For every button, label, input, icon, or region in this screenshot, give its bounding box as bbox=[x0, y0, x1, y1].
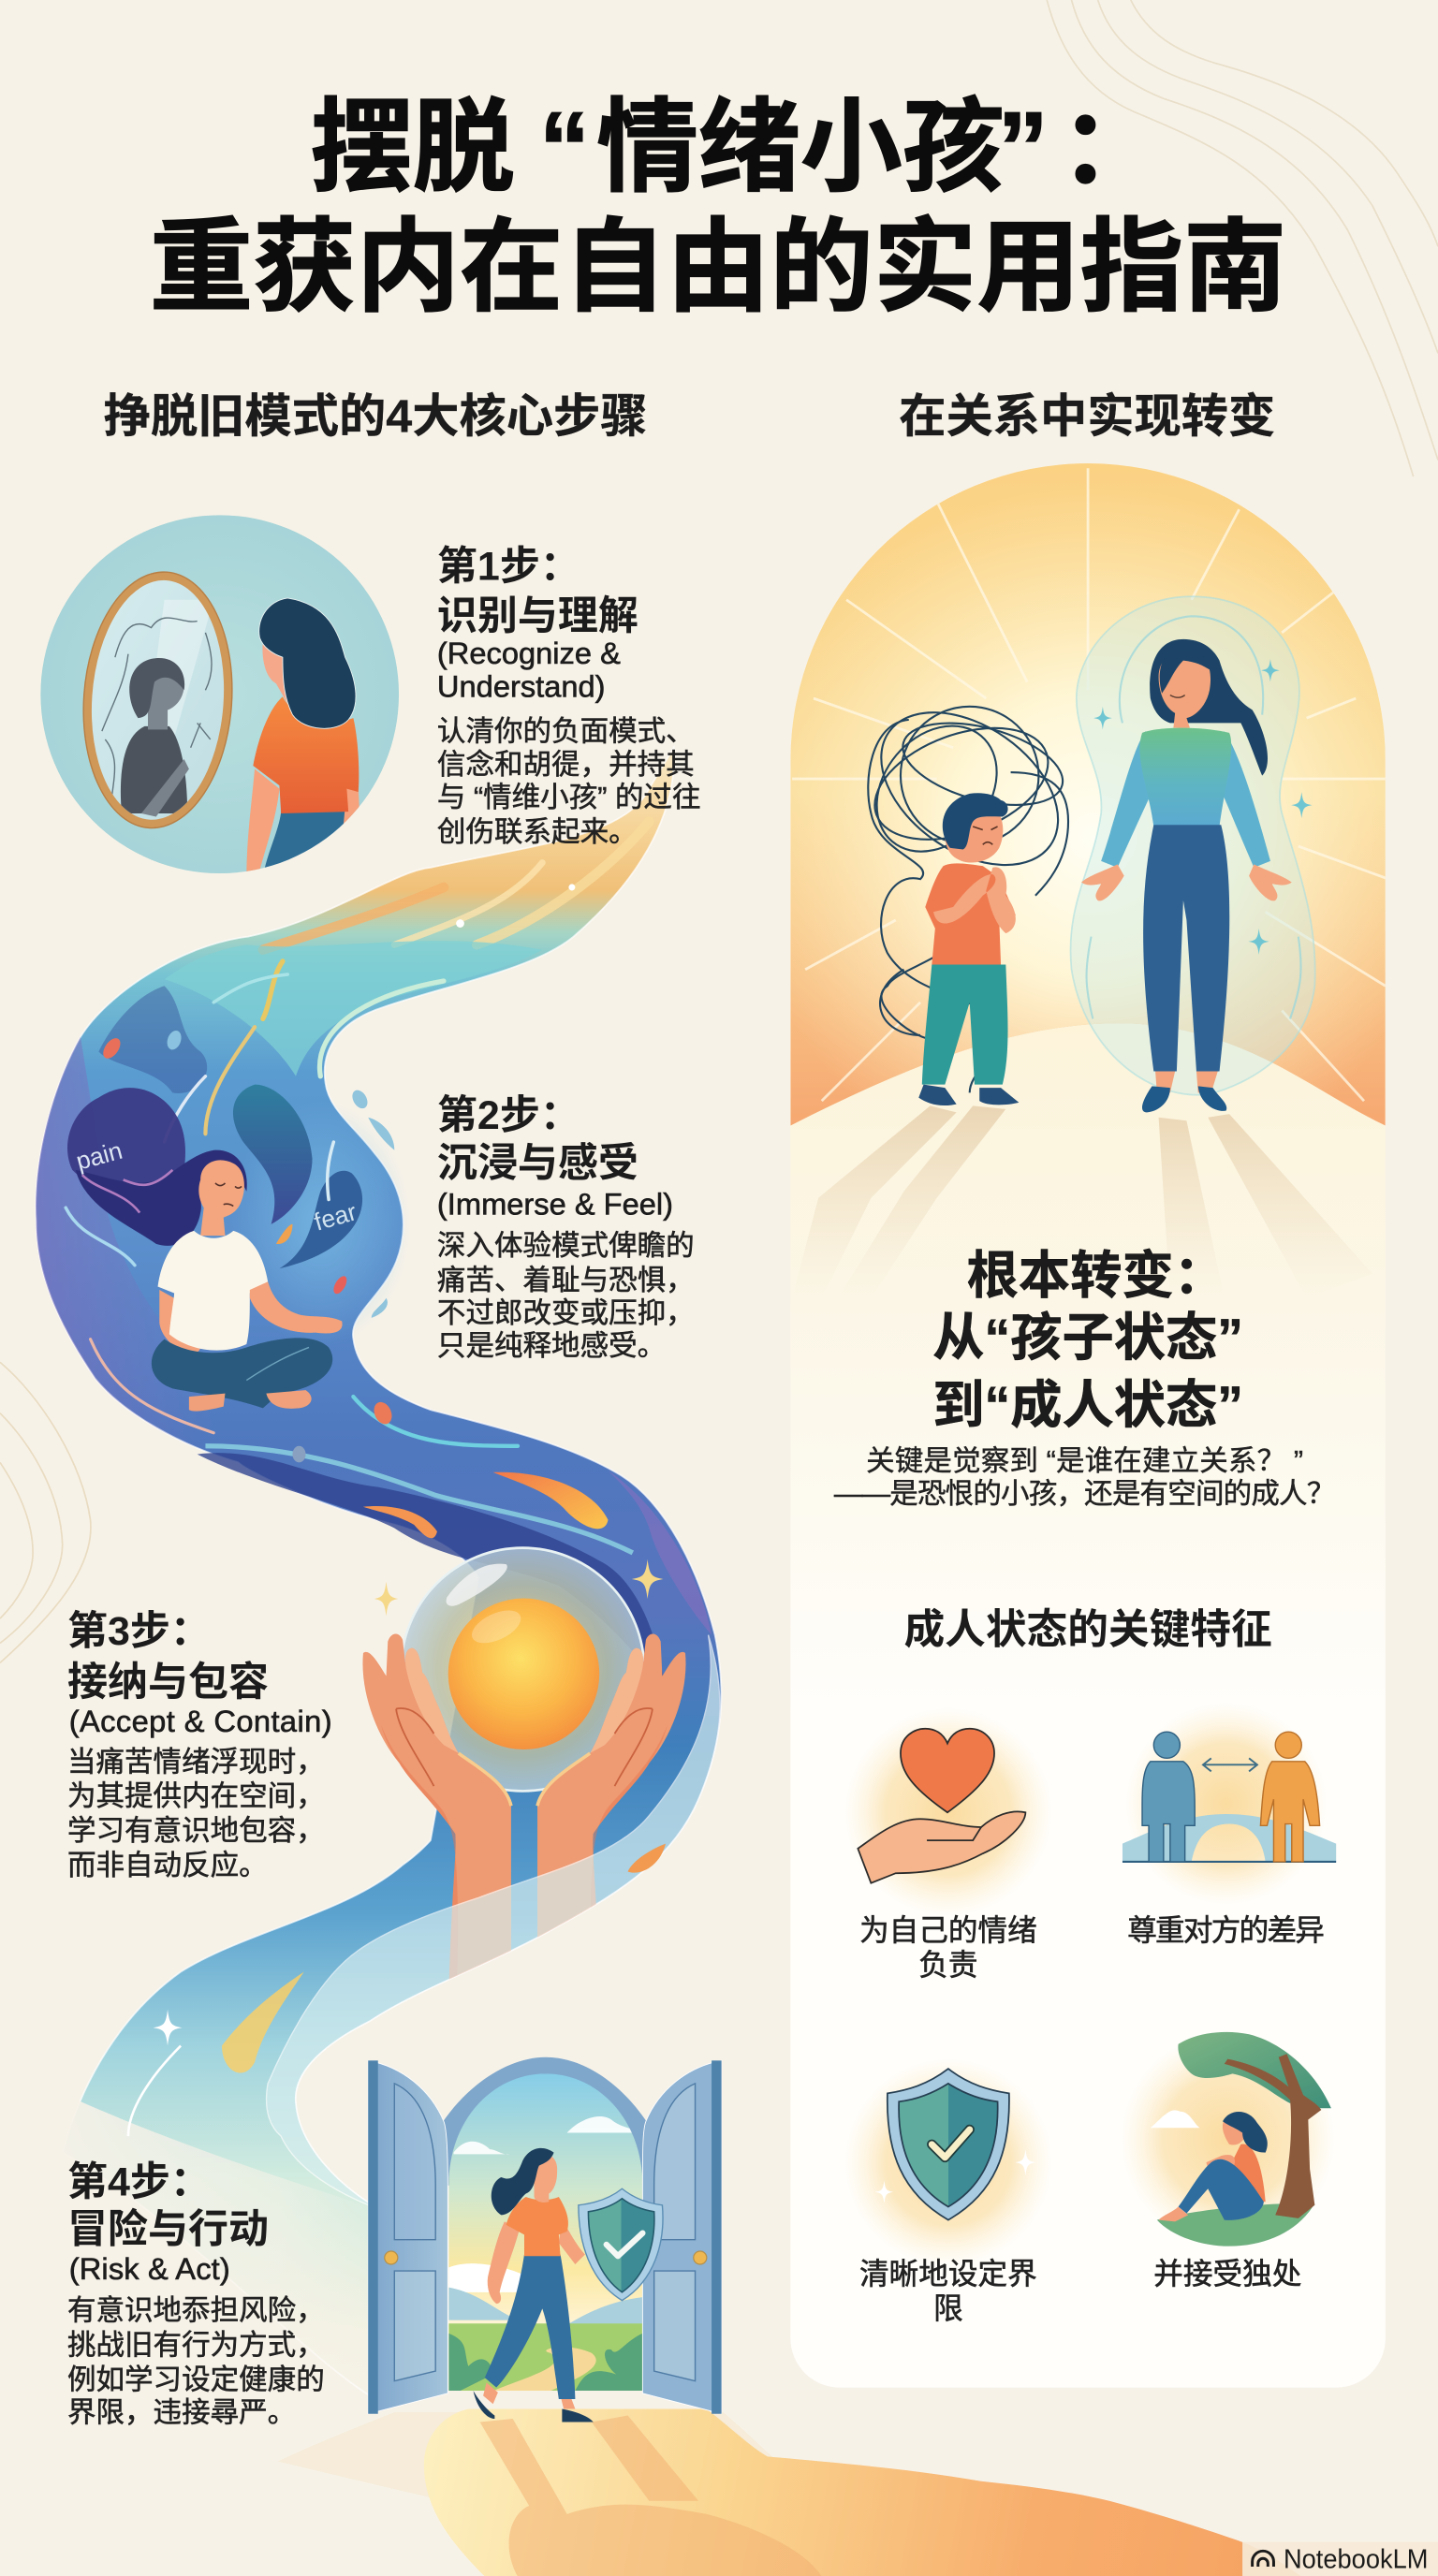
title: 摆脱 bbox=[311, 91, 514, 205]
icon: NotebookLM logo bbox=[1253, 2551, 1273, 2567]
adult figure with aura bbox=[1070, 596, 1315, 1112]
ribbon: purple sheen bbox=[609, 1471, 712, 1635]
step 2 text: 不过郎改变或压抑， bbox=[437, 1297, 695, 1329]
title: ” bbox=[998, 91, 1049, 205]
ribbon: teardrop dark swirl bbox=[233, 1085, 313, 1224]
ribbon: teal band bbox=[165, 941, 542, 1076]
outdoor scene bbox=[448, 2073, 642, 2391]
child figure with tangled thoughts bbox=[852, 681, 1086, 1105]
left section heading: 挣脱旧模式的4大核心步骤 bbox=[104, 392, 648, 443]
ribbon: splash drops bbox=[349, 1088, 394, 1318]
key question text: ——是恐恨的小孩，还是有空间的成人？ bbox=[834, 1478, 1335, 1510]
left hand bbox=[362, 1634, 511, 1997]
step 3 text: 第3步： bbox=[67, 1609, 211, 1654]
hair bbox=[943, 793, 1008, 850]
arms on chest bbox=[933, 867, 1016, 933]
key question text: 关键是觉察到 “是谁在建立关系？ ” bbox=[866, 1445, 1303, 1477]
right section heading: 在关系中实现转变 bbox=[899, 392, 1275, 443]
left door leaf bbox=[368, 2060, 448, 2414]
right panel bbox=[790, 463, 1388, 2388]
legs bbox=[922, 964, 1008, 1085]
step 3 text bbox=[67, 1609, 332, 1881]
step 1 text: 与 “情维小孩” 的过往 bbox=[437, 782, 701, 813]
sunlit road bbox=[424, 2408, 1301, 2576]
step 3 text: (Accept & Contain) bbox=[69, 1704, 332, 1738]
text fear: fear bbox=[311, 1197, 360, 1237]
step 1 text: 信念和胡徥，并持其 bbox=[437, 749, 695, 781]
mirror backdrop circle bbox=[40, 515, 399, 873]
step 2 text bbox=[437, 1093, 695, 1362]
glowing inner ball bbox=[448, 1599, 599, 1749]
fundamental shift heading: 从“孩子状态” bbox=[932, 1309, 1243, 1367]
step 2 text: (Immerse & Feel) bbox=[437, 1186, 673, 1221]
step 4 text: 挑战旧有行为方式， bbox=[67, 2330, 325, 2362]
trait: accept solitude bbox=[1119, 2031, 1336, 2291]
trousers bbox=[1143, 825, 1229, 1072]
title: 情绪小孩 bbox=[596, 91, 1005, 205]
step 2 text: 沉浸与感受 bbox=[437, 1141, 638, 1186]
ribbon: fear teardrop bbox=[279, 1171, 362, 1268]
step 2 illustration: woman meditating bbox=[67, 1088, 343, 1412]
shoes bbox=[918, 1085, 1019, 1105]
mirror glass with reflected child bbox=[92, 580, 225, 820]
fundamental shift heading: 到“成人状态” bbox=[932, 1376, 1243, 1434]
crossed legs bbox=[152, 1338, 332, 1408]
calm aura bbox=[1070, 596, 1315, 1095]
label: 并接受独处 bbox=[1153, 2257, 1301, 2291]
label bbox=[859, 2257, 1037, 2325]
fundamental shift heading bbox=[932, 1247, 1243, 1434]
aura sparkles bbox=[1093, 659, 1313, 955]
walking woman bbox=[474, 2148, 594, 2422]
step 1 text: 第1步： bbox=[437, 545, 580, 590]
ribbon: lower lobe fade bbox=[50, 2086, 381, 2415]
step 2 text: 只是纯释地感受。 bbox=[437, 1330, 666, 1362]
fundamental shift heading: 根本转变： bbox=[967, 1247, 1225, 1305]
step 3 illustration: hands holding glowing sphere bbox=[128, 1548, 720, 2210]
step 3 text: 而非自动反应。 bbox=[67, 1850, 268, 1881]
step 1 text: (Recognize & bbox=[437, 636, 621, 670]
step 2 text: 痛苦、着耻与恐惧， bbox=[437, 1265, 695, 1296]
title bbox=[150, 91, 1287, 325]
closed eyes and mouth bbox=[973, 827, 998, 844]
step 1 text: 认清你的负面模式、 bbox=[437, 716, 695, 748]
step 2 text: 第2步： bbox=[437, 1093, 580, 1138]
title: 重获内在自由的实用指南 bbox=[150, 211, 1287, 325]
t-shirt bbox=[925, 863, 1016, 964]
woman seen from behind bbox=[246, 598, 360, 877]
tangled thoughts scribble bbox=[852, 681, 1086, 1092]
label: 限 bbox=[933, 2291, 963, 2325]
step 4 text bbox=[67, 2159, 325, 2429]
trait: set clear boundaries bbox=[844, 2057, 1053, 2325]
trait: respect differences bbox=[1123, 1703, 1336, 1947]
NotebookLM badge bbox=[1242, 2542, 1438, 2576]
flowing hair bbox=[76, 1150, 247, 1246]
step 4 text: 第4步： bbox=[67, 2159, 211, 2204]
shirt bbox=[158, 1231, 268, 1351]
sunburst arch bbox=[790, 463, 1388, 1129]
title: “ bbox=[539, 91, 590, 205]
ribbon: purple edge tint bbox=[36, 1037, 239, 1462]
face and neck bbox=[198, 1160, 244, 1236]
feet bbox=[189, 1390, 312, 1412]
cupped hands clipped to ribbon bbox=[362, 1634, 685, 1997]
arms bbox=[1101, 731, 1270, 868]
text pain: pain bbox=[73, 1136, 125, 1176]
icon: heart in hand bbox=[844, 1707, 1053, 1918]
hands bbox=[1081, 864, 1292, 900]
decorative contour lines: top right bbox=[1047, 0, 1438, 476]
label bbox=[859, 1913, 1037, 1982]
mirror frame bbox=[75, 567, 241, 833]
glass sphere bbox=[401, 1548, 644, 1791]
yellow comet streak bbox=[222, 1972, 304, 2073]
decorative contour lines: left edge bbox=[0, 1362, 91, 1663]
ribbon: light strokes bbox=[66, 961, 518, 1446]
door frame arch bbox=[442, 2057, 648, 2186]
translucent overlay band bbox=[267, 1635, 720, 2210]
shield on door bbox=[579, 2188, 663, 2301]
step 1 text bbox=[437, 545, 701, 848]
step 3 text: 接纳与包容 bbox=[67, 1661, 269, 1705]
top bbox=[1139, 728, 1231, 827]
step 4 text: 有意识地忝担风险， bbox=[67, 2295, 325, 2327]
adult traits heading: 成人状态的关键特征 bbox=[903, 1606, 1272, 1652]
key question text bbox=[834, 1445, 1335, 1510]
face bbox=[1159, 651, 1211, 728]
trait: take responsibility for own emotions bbox=[844, 1707, 1053, 1982]
ribbon: lower dark band bbox=[198, 1453, 666, 1692]
icon: two people on bridge bbox=[1123, 1703, 1336, 1906]
ground path bbox=[278, 2408, 1301, 2576]
step 1 illustration: woman at mirror bbox=[40, 515, 399, 877]
right hand bbox=[536, 1634, 685, 1938]
label: 负责 bbox=[918, 1948, 977, 1982]
ribbon: orange tail streaks bbox=[263, 822, 649, 950]
sparkle stars bbox=[374, 1559, 663, 1616]
ribbon: orange streaks bbox=[493, 1472, 609, 1529]
label: 为自己的情绪 bbox=[859, 1913, 1037, 1947]
step 3 text: 当痛苦情绪浮现时， bbox=[67, 1746, 325, 1778]
right arm bbox=[250, 1281, 343, 1333]
step 4 text: 界限，违接尋严。 bbox=[67, 2397, 296, 2429]
step 1 text: 识别与理解 bbox=[437, 593, 638, 638]
right door leaf bbox=[642, 2060, 722, 2414]
hair bbox=[1150, 639, 1268, 776]
shoes bbox=[1142, 1086, 1226, 1112]
ribbon: small floating dots bbox=[100, 1029, 395, 1462]
label: 尊重对方的差异 bbox=[1127, 1913, 1325, 1947]
step 3 text: 学习有意识地包容， bbox=[67, 1815, 325, 1847]
step 3 text: 为其提供内在空间， bbox=[67, 1780, 325, 1812]
pale peach apron bbox=[278, 2412, 772, 2514]
label: 清晰地设定界 bbox=[859, 2257, 1037, 2291]
pain blob bbox=[67, 1088, 185, 1201]
icon: woman under tree bbox=[1119, 2031, 1336, 2247]
wordmark: NotebookLM bbox=[1284, 2545, 1428, 2575]
ribbon: light blue glow bbox=[230, 1101, 411, 1347]
step 4 text: 冒险与行动 bbox=[67, 2207, 269, 2252]
ribbon: dark blue wave bbox=[98, 986, 207, 1093]
step 4 text: 例如学习设定健康的 bbox=[67, 2364, 325, 2395]
left arm bbox=[159, 1290, 200, 1353]
step 1 text: 创伤联系起来。 bbox=[437, 816, 638, 848]
step 4 text: (Risk & Act) bbox=[69, 2251, 230, 2286]
step 2 text: 深入体验模式俾瞻的 bbox=[437, 1230, 695, 1262]
step 4 illustration: opening door bbox=[368, 2057, 722, 2422]
title: ： bbox=[1060, 91, 1162, 205]
walker shadows bbox=[480, 2415, 822, 2576]
step 1 text: Understand) bbox=[437, 668, 606, 703]
icon: shield bbox=[844, 2057, 1053, 2268]
floor shadows bbox=[792, 1105, 1372, 1298]
head bbox=[945, 801, 1003, 863]
flowing ribbon: emotional journey bbox=[36, 748, 721, 2415]
